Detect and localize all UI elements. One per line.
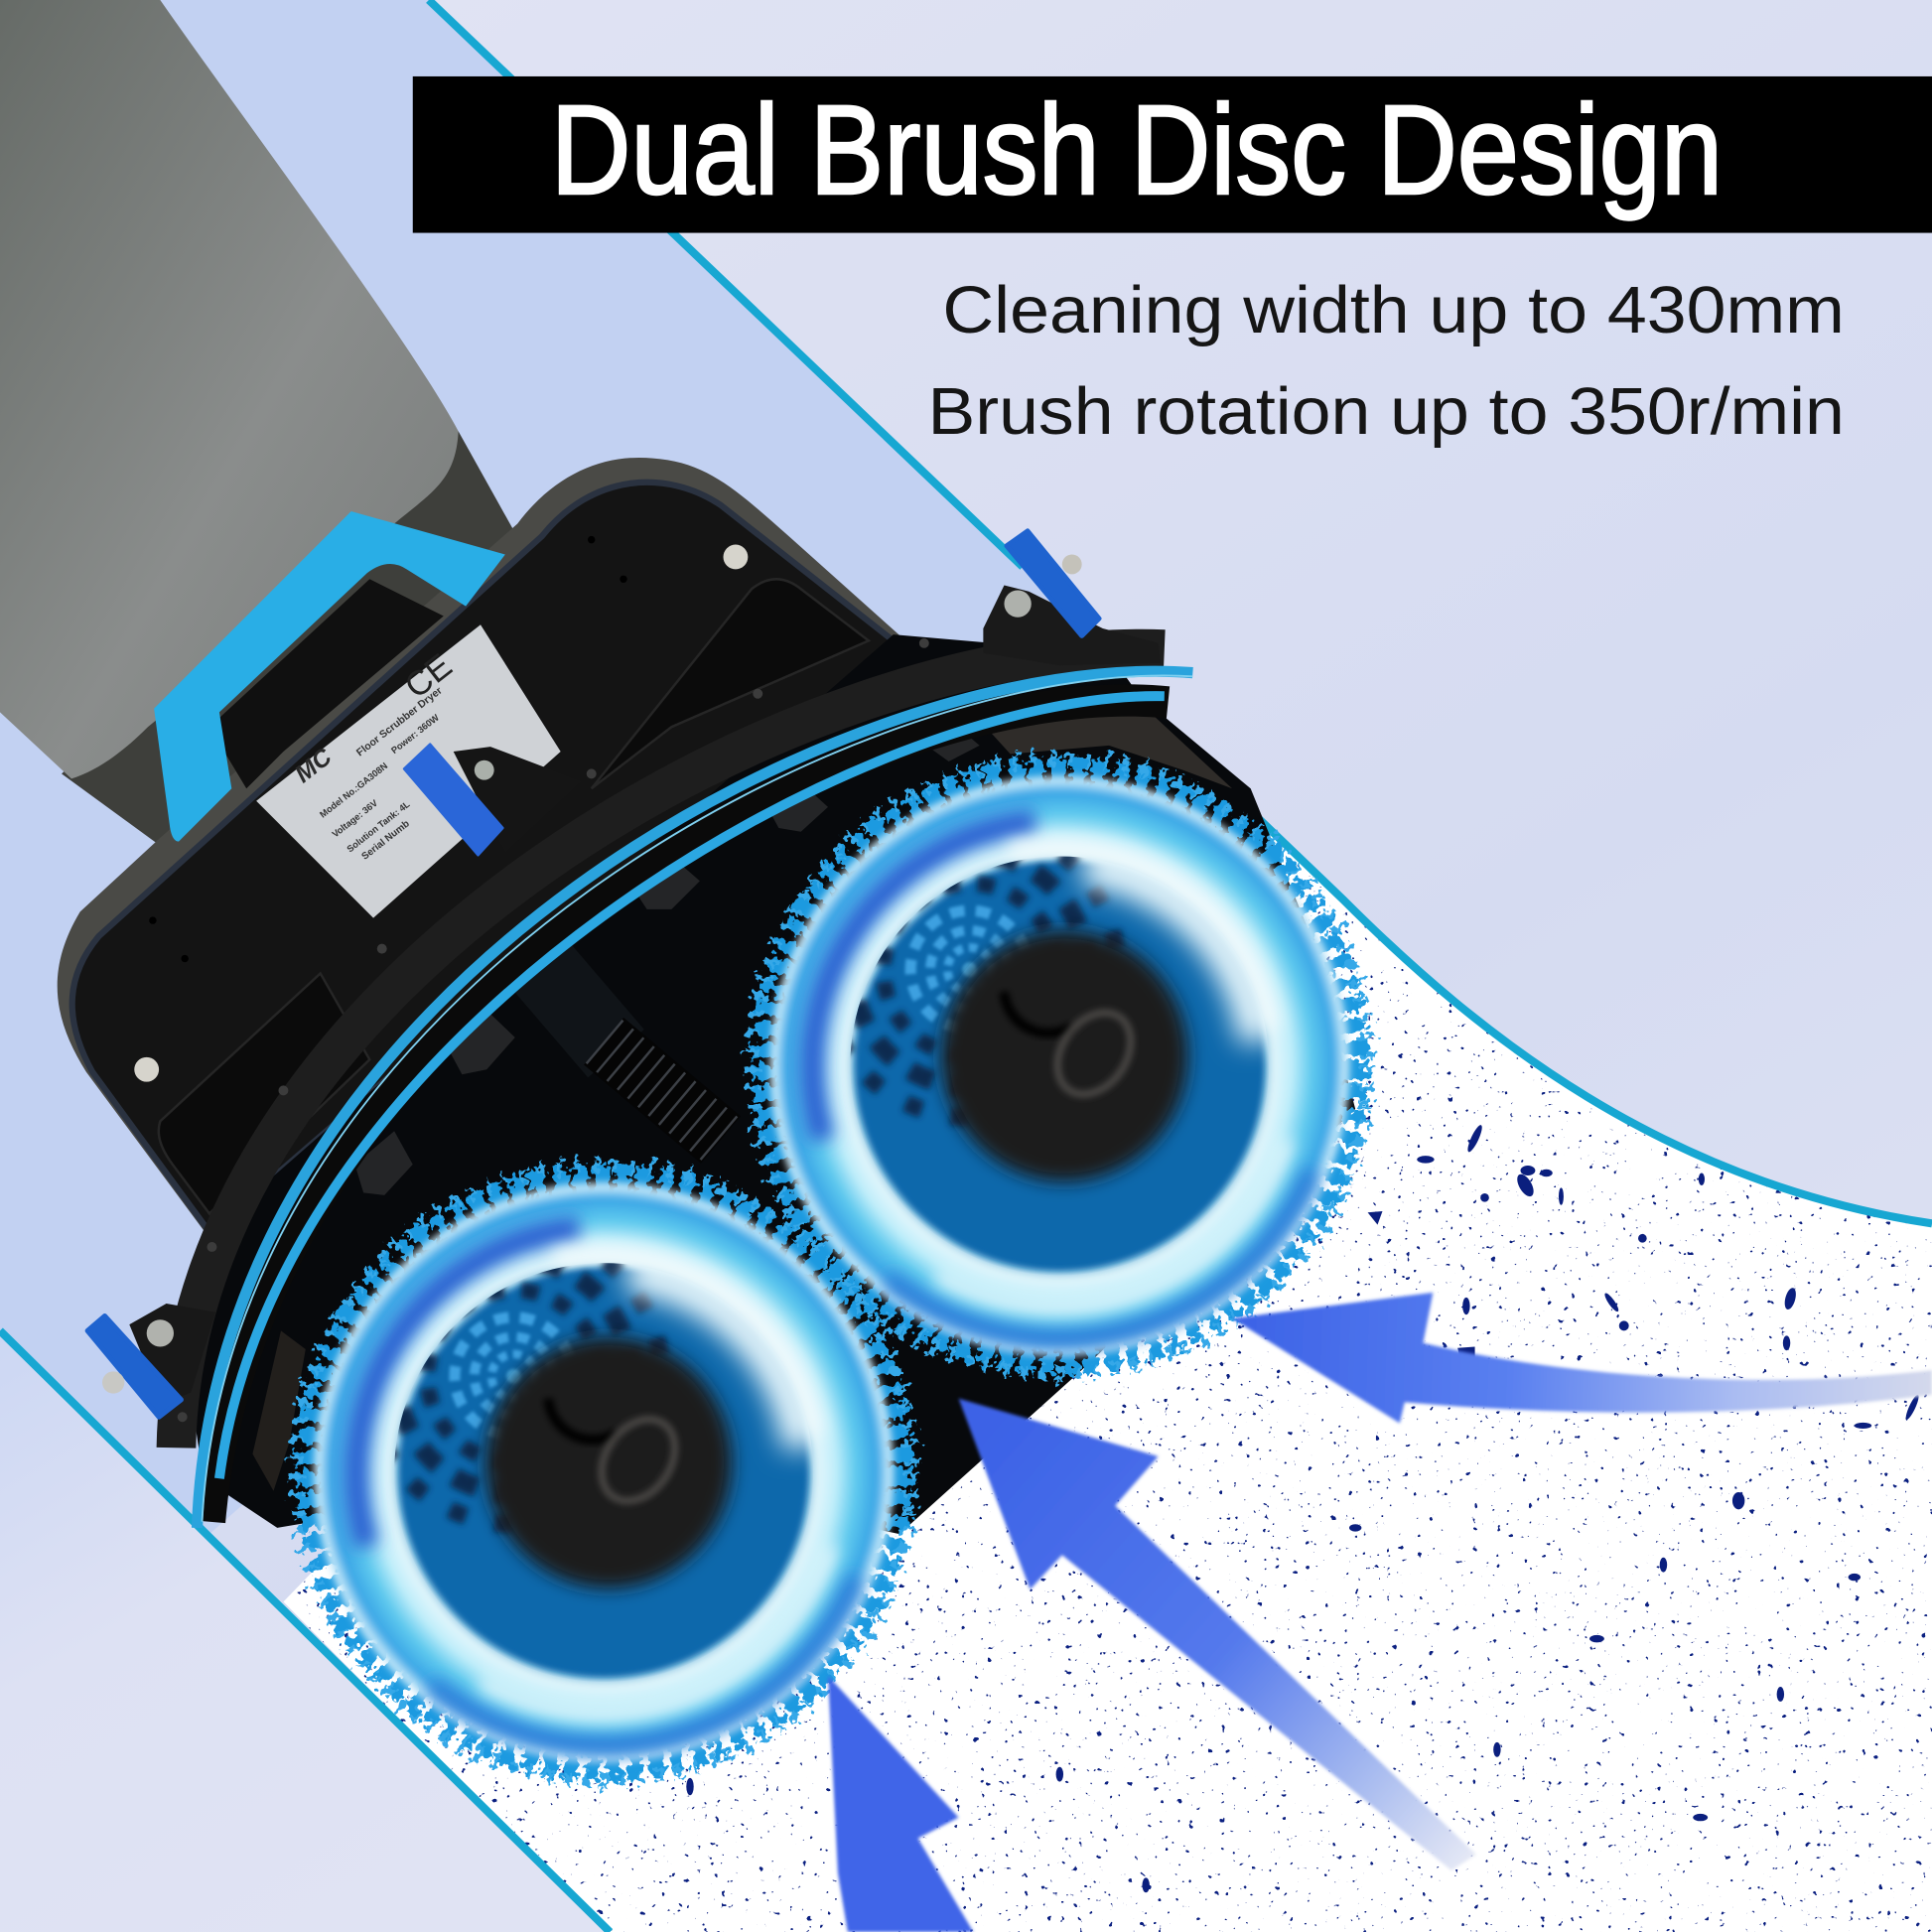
arrow: from the right	[1232, 1293, 1932, 1423]
brush disc: left spinning brush	[296, 1165, 911, 1780]
floor: white cleaned surface with navy speckles	[284, 834, 1932, 1932]
chassis: black underside	[185, 634, 1355, 1534]
handle: cyan carry handle	[154, 511, 505, 842]
product label plate	[256, 624, 561, 918]
chassis: knobs, gears	[252, 702, 1232, 1491]
product label plate: Voltage: 36V	[331, 797, 380, 840]
product label plate: Power: 360W	[389, 712, 441, 756]
product label plate: Serial Numb	[359, 818, 412, 863]
background: periwinkle diagonal band	[0, 0, 1146, 1534]
product label plate: Solution Tank: 4L	[345, 799, 412, 854]
product label plate: MC	[290, 743, 338, 788]
arrow: bottom	[828, 1676, 973, 1932]
arrow: diagonal centre	[959, 1399, 1476, 1870]
machine body: gray column	[0, 0, 523, 850]
bumper wheel: top right	[983, 531, 1161, 665]
bumper wheel: bottom left	[87, 1304, 215, 1417]
squeegee: curved black and blue blades	[176, 638, 1192, 1528]
bracket and blue bumper on label side	[404, 745, 582, 855]
background: lower-left lavender corner	[0, 1330, 610, 1932]
product label plate: CE	[398, 647, 459, 706]
spec: brush rotation: Brush rotation up to 350r/min	[928, 374, 1845, 449]
spec: cleaning width: Cleaning width up to 430mm	[942, 273, 1845, 347]
product label plate: Floor Scrubber Dryer	[354, 685, 445, 759]
title banner: Dual Brush Disc Design	[551, 79, 1723, 221]
brush disc: right spinning brush	[752, 758, 1368, 1374]
machine housing: grey back rim	[58, 458, 905, 1238]
machine housing: inner black panel	[72, 483, 894, 1232]
product label plate: Model No.:GA308N	[318, 760, 390, 820]
hose: corrugated vacuum hose	[542, 967, 721, 1140]
